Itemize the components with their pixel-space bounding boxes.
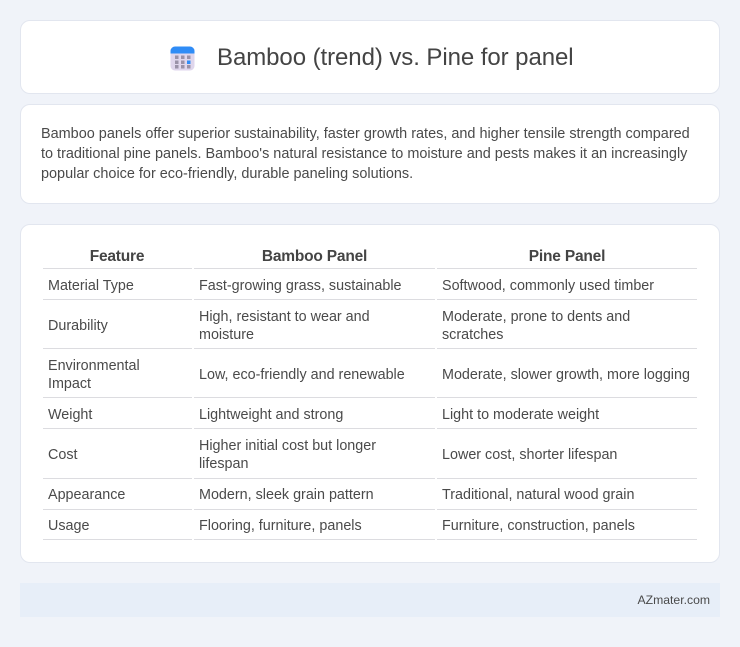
comparison table: Moderate, slower growth, more logging — [442, 367, 690, 383]
comparison table: Environmental — [48, 358, 140, 374]
header panel — [20, 20, 720, 94]
comparison table: Modern, sleek grain pattern — [199, 487, 374, 503]
comparison table: Higher initial cost but longer — [199, 438, 376, 454]
comparison table: Cost — [48, 447, 78, 463]
comparison table: Furniture, construction, panels — [442, 518, 635, 534]
comparison table: Appearance — [48, 487, 125, 503]
summary text — [41, 126, 690, 182]
comparison table: Durability — [48, 318, 108, 334]
comparison table: Flooring, furniture, panels — [199, 518, 362, 534]
comparison table — [43, 248, 697, 540]
comparison table: scratches — [442, 327, 503, 343]
header: pine panel: Pine Panel — [529, 248, 605, 265]
summary text: popular choice for eco-friendly, durable paneling solutions. — [41, 166, 413, 182]
comparison table: High, resistant to wear and — [199, 309, 370, 325]
title: Bamboo (trend) vs. Pine for panel — [217, 44, 574, 71]
comparison table: Light to moderate weight — [442, 407, 599, 423]
summary text: to traditional pine panels. Bamboo's natural resistance to moisture and pests makes it an increasingly — [41, 146, 687, 162]
comparison table: Lower cost, shorter lifespan — [442, 447, 617, 463]
footer bar — [20, 583, 720, 617]
summary text: Bamboo panels offer superior sustainability, faster growth rates, and higher tensile strength compared — [41, 126, 690, 142]
comparison table: Lightweight and strong — [199, 407, 343, 423]
comparison table: Softwood, commonly used timber — [442, 278, 654, 294]
comparison table: Weight — [48, 407, 92, 423]
header: feature: Feature — [90, 248, 144, 265]
comparison table: Impact — [48, 376, 91, 392]
icon: calendar — [170, 46, 194, 70]
comparison table: Traditional, natural wood grain — [442, 487, 634, 503]
comparison table: Usage — [48, 518, 89, 534]
table panel — [20, 224, 720, 563]
comparison table: Low, eco-friendly and renewable — [199, 367, 405, 383]
footer brand text: AZmater.com — [638, 593, 710, 607]
comparison table: lifespan — [199, 456, 248, 472]
summary panel — [20, 104, 720, 204]
comparison table: moisture — [199, 327, 254, 343]
comparison table: Moderate, prone to dents and — [442, 309, 630, 325]
comparison table: Fast-growing grass, sustainable — [199, 278, 402, 294]
header: bamboo panel: Bamboo Panel — [262, 248, 367, 265]
comparison table: Material Type — [48, 278, 134, 294]
